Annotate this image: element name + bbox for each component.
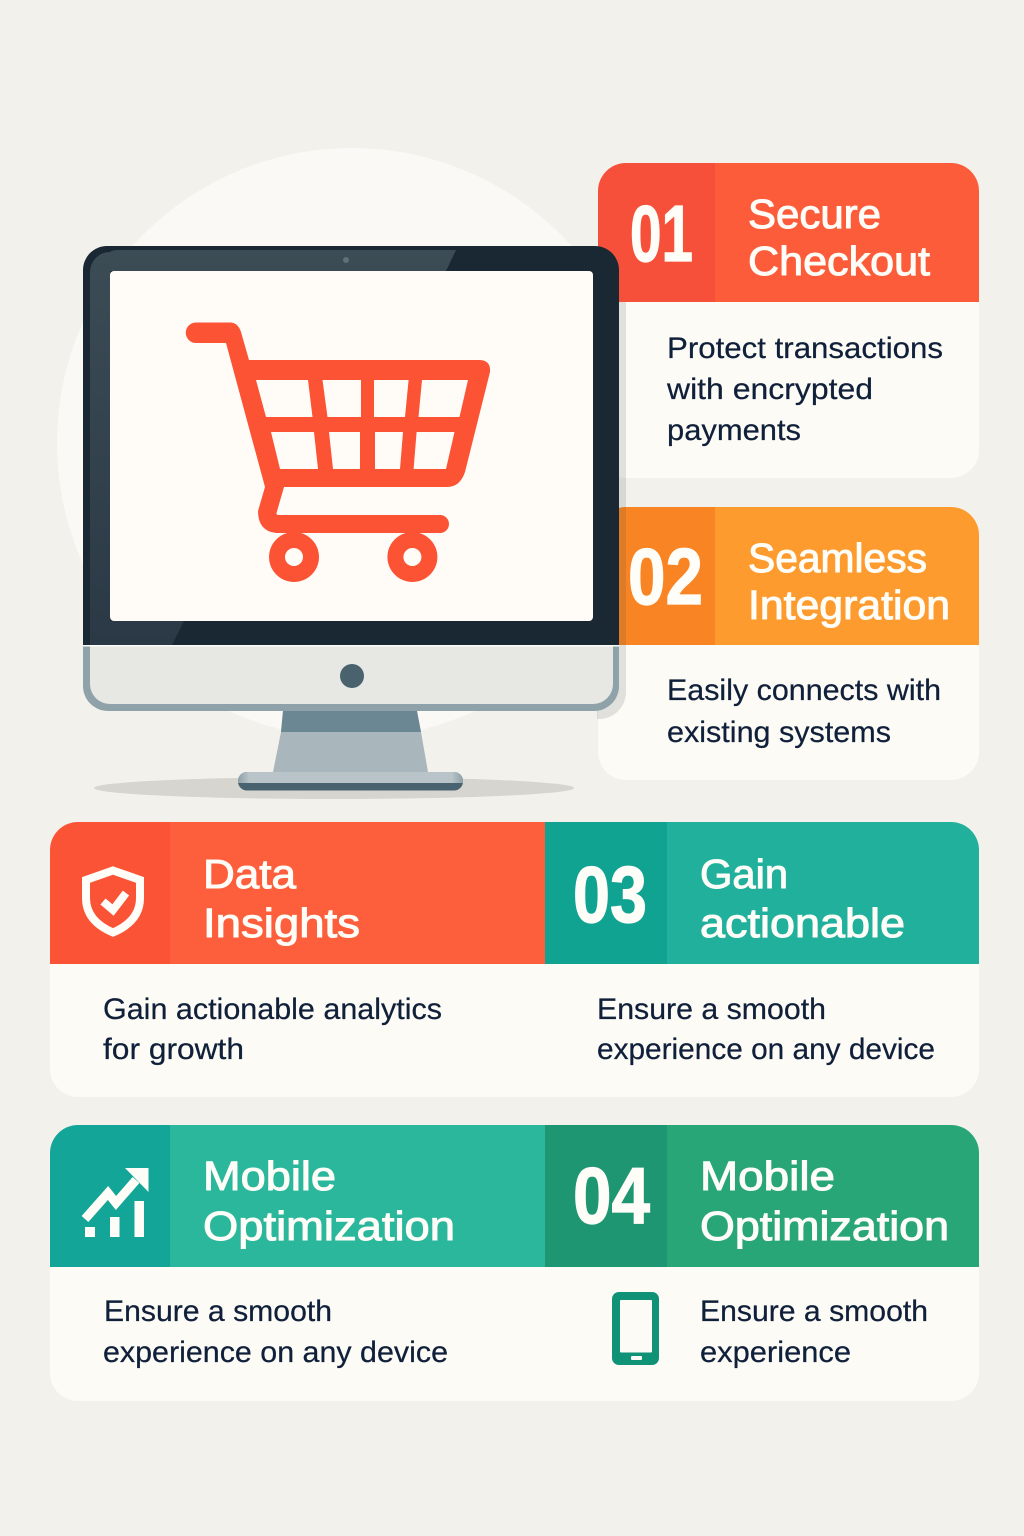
heading: Mobile Optimization left: Mobile bbox=[203, 1153, 336, 1199]
heading: Gain actionable: Gain bbox=[700, 851, 788, 897]
icon: growth chart bbox=[85, 1168, 148, 1237]
description: mobile optimization right: Ensure a smooth bbox=[700, 1295, 928, 1328]
heading: Secure Checkout: Secure bbox=[748, 191, 881, 237]
camera bbox=[343, 257, 349, 263]
icon: shopping cart bbox=[186, 322, 490, 582]
heading: Seamless Integration: Integration bbox=[748, 582, 950, 628]
floor shadow bbox=[94, 777, 574, 799]
heading: Mobile Optimization left: Optimization bbox=[203, 1203, 455, 1249]
description: mobile optimization right: experience bbox=[700, 1336, 851, 1369]
description: data insights: Gain actionable analytics bbox=[103, 993, 442, 1026]
heading: Data Insights: Data bbox=[203, 851, 296, 897]
panel: Data Insights and 03 bbox=[50, 822, 979, 1097]
cart wheel left bbox=[269, 532, 319, 582]
number 02: 02 bbox=[628, 532, 703, 621]
power button bbox=[340, 664, 364, 688]
heading: Gain actionable: actionable bbox=[700, 900, 905, 946]
screen bbox=[110, 271, 593, 621]
description: device experience: Ensure a smooth bbox=[597, 993, 826, 1026]
cart wheel right bbox=[387, 532, 437, 582]
panel: Mobile Optimization and 04 bbox=[50, 1125, 979, 1401]
description: secure checkout: Protect transactions bbox=[667, 332, 943, 365]
monitor bezel bbox=[83, 246, 619, 645]
monitor chin bbox=[83, 640, 619, 711]
icon: smartphone bbox=[612, 1292, 659, 1365]
heading: Mobile Optimization right: Optimization bbox=[700, 1203, 949, 1249]
description: seamless integration: Easily connects with bbox=[667, 674, 941, 707]
description: device experience: experience on any device bbox=[597, 1033, 935, 1066]
description: secure checkout: payments bbox=[667, 414, 801, 447]
monitor stand bbox=[238, 711, 463, 790]
monitor shadow on cards bbox=[590, 302, 626, 719]
number 01: 01 bbox=[630, 189, 693, 278]
description: seamless integration: existing systems bbox=[667, 716, 891, 749]
number 04: 04 bbox=[573, 1151, 650, 1240]
illustration: desktop monitor with cart bbox=[83, 246, 619, 799]
number 03: 03 bbox=[573, 850, 647, 939]
icon: shield with check bbox=[86, 870, 140, 932]
description: mobile optimization left: experience on any device bbox=[103, 1336, 448, 1369]
description: mobile optimization left: Ensure a smooth bbox=[104, 1295, 332, 1328]
description: secure checkout: with encrypted bbox=[666, 373, 873, 406]
panel: 02 Seamless Integration bbox=[598, 507, 979, 780]
heading: Secure Checkout: Checkout bbox=[748, 238, 931, 284]
panel: 01 Secure Checkout bbox=[598, 163, 979, 478]
background circle bbox=[57, 148, 571, 730]
heading: Seamless Integration: Seamless bbox=[748, 535, 927, 581]
heading: Data Insights: Insights bbox=[203, 900, 360, 946]
description: data insights: for growth bbox=[103, 1033, 244, 1066]
heading: Mobile Optimization right: Mobile bbox=[700, 1153, 835, 1199]
